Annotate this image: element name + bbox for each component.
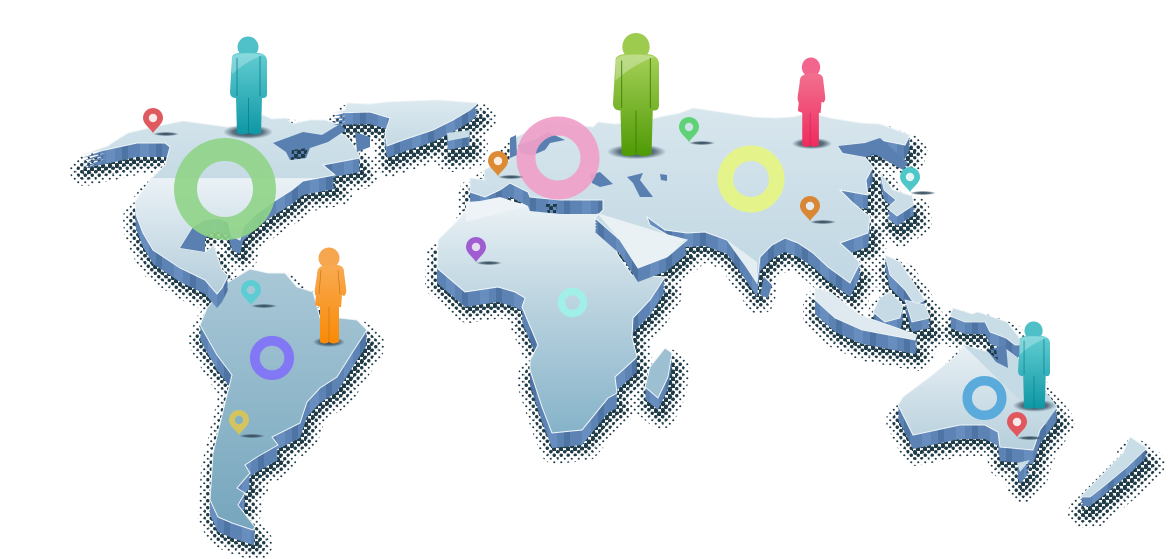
island: New Zealand — [1080, 437, 1147, 506]
halftone drop shadow — [85, 116, 1150, 547]
island: Greenland — [333, 100, 478, 158]
ring: Australia blue — [967, 381, 1002, 415]
person: pink woman Asia — [792, 58, 832, 149]
pin: purple West Africa — [466, 237, 502, 265]
islands: Southeast Asia and Japan — [815, 172, 930, 354]
pin: orange Western Europe — [488, 151, 524, 179]
person: green man Russia — [607, 33, 666, 159]
person: teal man North America — [223, 36, 273, 139]
continent: Africa — [437, 200, 665, 448]
island: Madagascar — [645, 348, 672, 410]
pin: yellow Argentina — [229, 410, 265, 438]
island: New Guinea — [950, 308, 1025, 357]
pin: teal Colombia — [241, 280, 277, 308]
person: teal man Australia — [1013, 321, 1056, 412]
ring: North America green — [186, 150, 264, 228]
pin: red Australia — [1007, 412, 1043, 440]
pin: orange China — [800, 196, 836, 224]
island: Tasmania — [1017, 460, 1030, 484]
ring: Europe pink — [526, 126, 590, 190]
island: Sri Lanka — [760, 277, 772, 298]
ring: South America purple — [255, 341, 289, 375]
continent: Eurasia — [466, 108, 910, 297]
pin: green Russia — [679, 117, 715, 145]
continent: South America — [200, 269, 367, 545]
island: Iceland — [447, 130, 470, 150]
continent: North America — [82, 115, 370, 308]
continent: Australia — [898, 345, 1057, 464]
pin: red Alaska — [143, 108, 179, 136]
ring: Africa cyan — [562, 292, 584, 314]
person: orange woman South America — [313, 248, 346, 347]
ring: Asia yellow — [725, 153, 777, 205]
pin: cyan Japan — [900, 167, 936, 195]
